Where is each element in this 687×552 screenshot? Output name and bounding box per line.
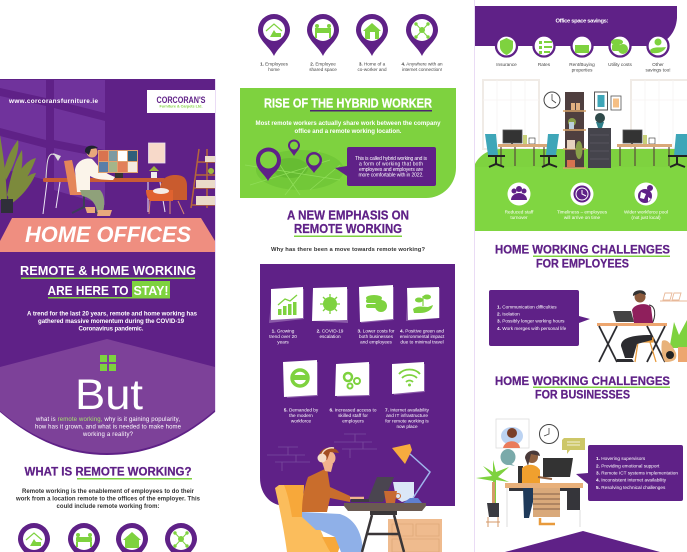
ladder shelf [191,149,215,208]
logo [147,90,215,113]
text: remote working definition: Remote working is the enablement of employees to do their [22,489,195,495]
laptop [367,477,394,502]
panel: left column hero and intro [0,79,215,367]
illustration: office furniture [485,92,687,168]
heading: challenges for employees [495,244,670,270]
heading: challenges for employees: FOR EMPLOYEES [536,258,629,270]
heading: remote and home working: STAY! [134,283,168,298]
labels: Utility costs [608,62,633,67]
heading: RISE OF THE HYBRID WORKER [264,96,432,110]
benefit labels: Timeliness – employees [557,210,608,214]
labels: Rent/Buying [569,62,595,67]
lamp [392,444,412,464]
desk [43,178,165,182]
subheading: why: Why has there been a move towards remote working? [271,247,425,253]
pin 3 co-worker home [356,14,388,56]
card 3: lower costs [359,285,394,323]
heading: what is remote working: WHAT IS REMOTE WORKING? [24,464,192,478]
callout: business challenges [576,445,683,501]
icon: staff [511,186,527,200]
row one labels [269,328,445,344]
callout: employee challenges [489,290,590,346]
row two labels [284,408,430,429]
row one labels: years [277,340,289,344]
callout: hybrid working: employees and employers are [359,167,423,173]
callout: employee challenges: 2. Isolation [497,312,520,316]
labels [496,62,671,72]
pin labels [260,62,443,72]
pin labels: 4. Anywhere with an [401,62,443,66]
table [344,503,426,511]
heading: a new emphasis: REMOTE WORKING [294,221,402,236]
labels: Insurance [496,62,517,67]
icon: green squares [100,355,116,371]
row one labels: 4. Positive green and [400,328,444,334]
intro paragraph: Coronavirus pandemic. [78,326,144,332]
benefit labels: turnover [510,215,528,220]
illustration: woman at computer [476,419,585,527]
heading: a new emphasis [287,208,409,237]
pin 2 shared space [307,14,339,56]
row two labels: 7. Internet availability [385,408,430,412]
benefit circles [508,182,658,206]
window light on wall [0,80,105,205]
callout: business challenges: 5. Resolving technical challenges [596,485,666,490]
row one labels: and employees [360,340,393,344]
row one labels: both businesses [359,334,394,339]
heading: challenges for employees: HOME WORKING CHALLENGES [495,244,670,256]
pin 4 internet [406,14,438,56]
benefit labels: will arrive on time [564,215,600,220]
cabinet and plant [588,113,611,168]
heading: Office space savings: [556,18,609,24]
row two labels: and IT infrastructure [386,413,428,418]
logo: Furniture & Carpets Ltd. [160,104,202,108]
heading: remote and home working: ARE HERE TO [48,283,128,298]
benefit labels [505,210,668,220]
heading: challenges for businesses: HOME WORKING CHALLENGES [495,376,670,388]
plant [0,135,36,205]
panel: rise of the hybrid worker [240,88,456,198]
icon: clock [574,186,590,202]
map texture [245,150,344,195]
heading: a new emphasis: A NEW EMPHASIS ON [287,208,409,222]
card 1: growing trend [269,287,304,323]
legs [302,512,363,552]
row two labels: 5. Demanded by [284,408,319,412]
labels: savings too! [645,68,671,72]
intro paragraph: A trend for the last 20 years, remote and home working has [27,310,198,318]
arrow: bottom purple triangle [505,531,660,552]
papers [393,482,414,502]
paragraph: office and a remote working location. [294,128,402,135]
question text [35,417,182,438]
callout: hybrid working [335,147,436,186]
panel: but question [0,339,215,455]
banner: home offices: HOME OFFICES [25,222,191,247]
callout: business challenges: 1. Hovering supervisors [596,456,646,461]
icon: globe [638,185,653,203]
pin labels: 3. Home of a [359,62,386,66]
illustration: home office [0,135,215,216]
row one labels: escalation [319,334,341,339]
question text: what is remote working, why is it gaining popularity, [35,417,180,423]
armchair [275,485,330,552]
pin labels: home [268,67,280,72]
card 6: access to skilled staff [335,362,370,397]
callout: hybrid working: This is called hybrid working and is [355,156,428,162]
card 7: wifi [392,362,425,395]
person [75,159,115,192]
question text: how has it grown, and what is needed to make home [35,424,182,430]
panel: reasons [260,264,455,506]
mug [384,491,397,503]
monitor with video call [98,150,138,178]
pin labels: 1. Employees [260,62,289,66]
pin labels: 2. Employee [310,62,336,66]
icons: map pins [256,140,322,181]
row two labels: the modern [289,413,313,418]
pin 1 home [258,14,290,56]
question text: working a reality? [82,432,134,438]
but word: But [75,371,143,419]
panel: green benefits [475,149,687,231]
torso [302,468,350,512]
paragraph: Most remote workers actually share work between the company [256,120,441,127]
callout: hybrid working: a form of working that both [359,162,423,168]
heading: challenges for businesses [495,376,670,402]
labels: properties [572,68,593,72]
banner: home offices [0,218,215,252]
row two labels: employers [342,418,364,424]
intro paragraph [27,310,198,332]
row one labels: 2. COVID-19 [317,328,344,334]
paragraph [256,120,441,135]
dresser [388,519,442,552]
illustration: woman at desk [597,290,687,362]
callout: employee challenges: 3. Possibly longer working hours [497,318,565,324]
row two labels: now place [396,424,418,429]
row one labels: trend over 20 [269,334,297,339]
panel: office space savings [475,6,677,72]
callout: employee challenges: 4. Work merges with personal life [497,326,567,331]
pins: left column locations [18,523,197,552]
row two labels: skilled staff for [338,413,368,418]
callout: business challenges: 3. Remote ICT systems implementation [596,470,678,476]
callout: hybrid working: more comfortable with in 2022. [358,172,424,178]
office windows [483,80,687,149]
benefit labels: Wider workforce pool [624,210,668,214]
pins: remote locations [258,14,443,72]
row two labels: 6. Increased access to [330,408,377,412]
benefit labels: (not just local) [631,215,661,220]
callout: business challenges: 4. Inconsistent internet availability [596,478,667,482]
pin labels: co-worker and [357,67,387,72]
card 4: green impact [406,287,440,321]
row one labels: 3. Lower costs for [357,328,395,334]
row two labels: workforce [291,418,312,424]
desk plant [149,166,159,171]
armchair with cat [146,175,187,214]
callout: employee challenges: 1. Communication difficulties [497,304,557,310]
icon circles [496,36,668,56]
card 5: modern workforce [283,360,318,398]
callout: business challenges: 2. Providing emotional support [596,463,660,468]
row two labels: for remote working is [385,418,429,424]
heading: challenges for businesses: FOR BUSINESSES [535,390,630,402]
head and headphones [322,462,333,472]
right desk [617,130,687,167]
row one labels: environmental impact [400,334,445,339]
row one labels: 1. Growing [272,328,295,334]
bookcase [563,92,586,168]
left desk [485,130,559,167]
illustration: person at laptop [267,434,442,552]
row one labels: due to minimal travel [400,340,444,344]
wall pictures [594,92,621,110]
pin labels: shared space [309,67,337,72]
card 2: covid [312,287,348,323]
heading: remote and home working [20,263,196,298]
text: remote working definition: could include remote working from: [56,504,160,510]
logo: CORCORAN'S [156,95,206,105]
benefit labels: Reduced staff [505,210,534,214]
wall clock [544,92,560,108]
heading: remote and home working: REMOTE & HOME WORKING [20,263,196,278]
text: remote working definition: work from a location remote to the offices of the employer. This [15,496,201,502]
labels: Other [652,62,664,67]
text: remote working definition [15,489,201,510]
labels: Rates [538,62,551,67]
website url: www.corcoransfurniture.ie [8,98,98,105]
calendar [148,143,165,163]
intro paragraph: gathered massive momentum during the COVID-19 [38,318,185,325]
icon glyphs [500,38,666,55]
chair [64,160,97,195]
lamp [46,153,61,178]
pin labels: internet connection! [402,67,442,72]
